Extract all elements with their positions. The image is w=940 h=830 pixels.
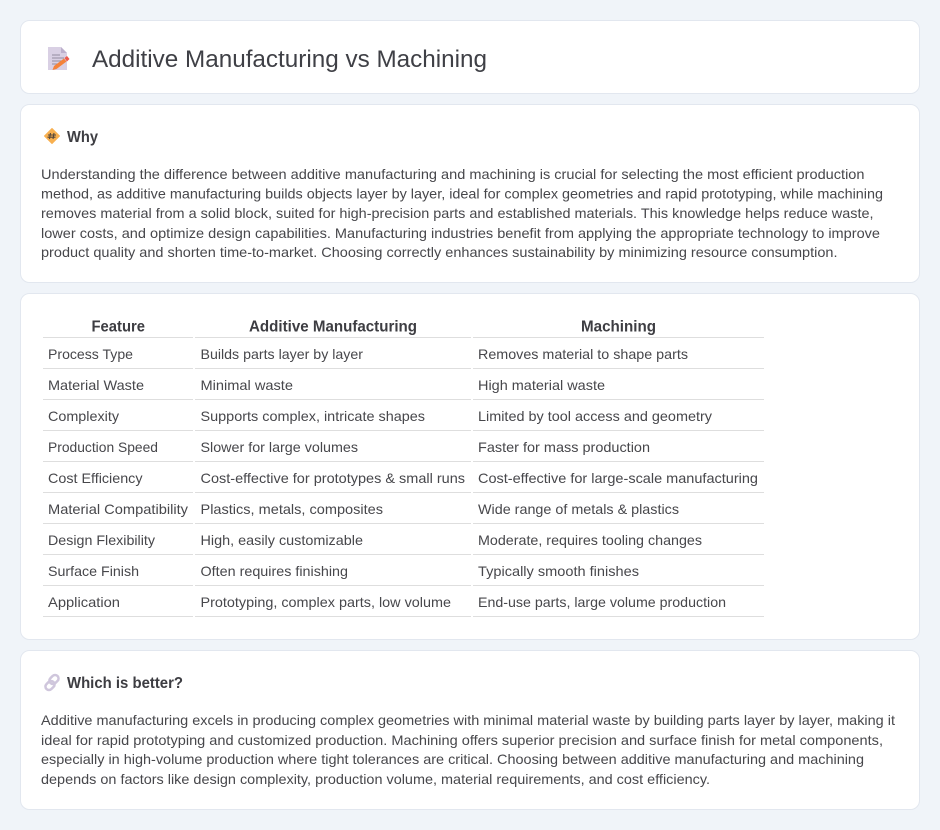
row: cost efficiency: Cost-effective for prototypes & small runs bbox=[200, 470, 465, 486]
icon: warning diamond bbox=[44, 128, 60, 144]
text block: why explanation: Understanding the difference between additive manufacturing and machining is crucial for selecting the most efficient production bbox=[41, 166, 864, 182]
panel: why bbox=[20, 104, 920, 282]
row: material waste: High material waste bbox=[478, 377, 605, 393]
row: design flexibility: Design Flexibility bbox=[48, 532, 155, 548]
row: production speed bbox=[48, 439, 650, 455]
text block: why explanation: lower costs, and optimize design capabilities. Manufacturing industries benefit from applying the appropriate technology to improve bbox=[41, 225, 880, 241]
text block: verdict: ideal for rapid prototyping and customized production. Machining offers superior precision and surface finish for metal components, bbox=[41, 732, 883, 748]
heading: which is better: Which is better? bbox=[67, 675, 183, 692]
text block: verdict: depends on factors like design complexity, production volume, material requirements, and cost efficiency. bbox=[41, 771, 710, 787]
row: cost efficiency: Cost-effective for large-scale manufacturing bbox=[478, 470, 758, 486]
panel: which is better bbox=[20, 650, 920, 810]
row: material compatibility: Material Compatibility bbox=[48, 501, 188, 517]
row: surface finish: Often requires finishing bbox=[200, 563, 348, 579]
row: application bbox=[48, 594, 726, 610]
row: material waste bbox=[48, 377, 605, 393]
row: process type bbox=[48, 346, 688, 362]
row: process type: Process Type bbox=[48, 346, 133, 362]
text block: why explanation bbox=[41, 166, 883, 260]
row: design flexibility bbox=[48, 532, 702, 548]
row: application: Prototyping, complex parts, low volume bbox=[200, 594, 451, 610]
text block: why explanation: product quality and shorten time-to-market. Choosing correctly enhances sustainability by minimizing resource consumption. bbox=[41, 244, 837, 260]
table header row: Machining bbox=[581, 318, 656, 336]
row: material waste: Minimal waste bbox=[200, 377, 293, 393]
row: material waste: Material Waste bbox=[48, 377, 144, 393]
panel: title header bbox=[20, 20, 920, 94]
row: surface finish: Typically smooth finishes bbox=[478, 563, 639, 579]
icon: chain link bbox=[44, 673, 60, 692]
row: complexity: Complexity bbox=[48, 408, 119, 424]
row: application: Application bbox=[48, 594, 120, 610]
row: surface finish: Surface Finish bbox=[48, 563, 139, 579]
table header row: Additive Manufacturing bbox=[249, 318, 417, 336]
text block: verdict: especially in high-volume production where tight tolerances are critical. Choosing between additive manufacturing and machining bbox=[41, 751, 864, 767]
icon: memo with pencil bbox=[48, 47, 70, 70]
table header row bbox=[92, 318, 656, 336]
row: complexity: Limited by tool access and geometry bbox=[478, 408, 712, 424]
row: material compatibility: Wide range of metals & plastics bbox=[478, 501, 679, 517]
row: process type: Builds parts layer by layer bbox=[200, 346, 363, 362]
row: material compatibility: Plastics, metals, composites bbox=[200, 501, 383, 517]
table header row: Feature bbox=[92, 318, 145, 336]
row: design flexibility: High, easily customizable bbox=[200, 532, 363, 548]
row: complexity bbox=[48, 408, 712, 424]
text block: why explanation: method, as additive manufacturing builds objects layer by layer, ideal for complex geometries and rapid prototyping, while machining bbox=[41, 186, 883, 202]
row: production speed: Production Speed bbox=[48, 439, 158, 455]
row: application: End-use parts, large volume production bbox=[478, 594, 726, 610]
row: material compatibility bbox=[48, 501, 679, 517]
text block: verdict: Additive manufacturing excels in producing complex geometries with minimal material waste by building parts layer by layer, making it bbox=[41, 712, 895, 728]
panel: comparison table bbox=[20, 294, 920, 640]
row: complexity: Supports complex, intricate shapes bbox=[200, 408, 425, 424]
row: cost efficiency: Cost Efficiency bbox=[48, 470, 142, 486]
row: production speed: Slower for large volumes bbox=[200, 439, 358, 455]
heading: why: Why bbox=[67, 129, 98, 146]
row: process type: Removes material to shape parts bbox=[478, 346, 688, 362]
text block: why explanation: removes material from a solid block, suited for high-precision parts and established materials. This knowledge helps reduce waste, bbox=[41, 205, 874, 221]
text block: verdict bbox=[41, 712, 895, 787]
row: design flexibility: Moderate, requires tooling changes bbox=[478, 532, 702, 548]
row: surface finish bbox=[48, 563, 639, 579]
row: production speed: Faster for mass production bbox=[478, 439, 650, 455]
row: cost efficiency bbox=[48, 470, 758, 486]
title: Additive Manufacturing vs Machining bbox=[92, 46, 487, 73]
